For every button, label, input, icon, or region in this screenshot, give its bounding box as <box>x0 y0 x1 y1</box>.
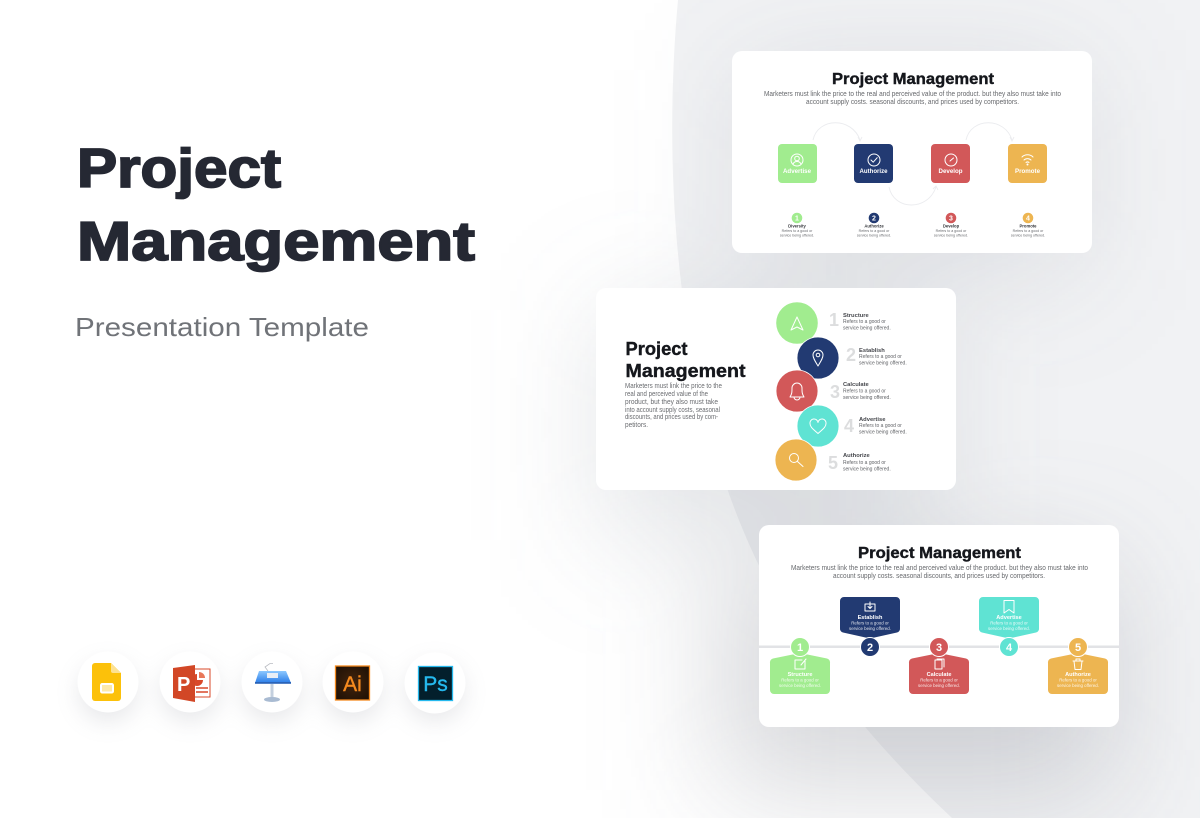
legend: authorize: service being offered. <box>857 234 891 238</box>
step 4: advertise: service being offered. <box>988 626 1030 631</box>
circle: search <box>775 439 817 481</box>
panel: top slide, process flow <box>732 51 1092 253</box>
description <box>764 91 1061 106</box>
item 1: Refers to a good or <box>843 319 886 325</box>
icon: powerpoint <box>173 665 210 702</box>
step 4: advertise: 4 <box>1006 642 1013 654</box>
step 1: structure <box>770 638 830 694</box>
legend: diversity <box>780 213 814 238</box>
step 2: establish: Refers to a good or <box>851 620 889 626</box>
step: promote: Promote <box>1015 168 1040 175</box>
legend: promote: 4 <box>1026 216 1030 222</box>
legend: develop: Develop <box>943 224 960 228</box>
step 4: advertise <box>979 597 1039 656</box>
heading: Project Management <box>832 71 994 88</box>
icon: photoshop <box>418 666 452 700</box>
card shadows <box>600 70 1110 790</box>
step 2: establish <box>840 597 900 656</box>
step: authorize: Authorize <box>860 168 888 175</box>
step 2: establish: service being offered. <box>849 626 891 631</box>
step 5: authorize <box>1048 638 1108 694</box>
description: petitors. <box>625 422 648 429</box>
item 4: Refers to a good or <box>859 423 902 429</box>
description: Marketers must link the price to the <box>625 383 722 390</box>
step 3: calculate: service being offered. <box>918 683 960 688</box>
description: account supply costs. seasonal discounts, and prices used by competitors. <box>833 573 1045 580</box>
step 3: calculate <box>909 638 969 694</box>
step 2: establish: 2 <box>867 642 873 654</box>
step 1: structure: 1 <box>797 642 803 654</box>
icon: illustrator: Ai <box>343 673 362 696</box>
legend: promote: Promote <box>1020 224 1037 228</box>
step 3: calculate: Refers to a good or <box>920 678 958 682</box>
circle: location <box>797 337 839 379</box>
icon: keynote <box>255 664 291 702</box>
item 1: 1 <box>829 310 839 330</box>
description <box>625 383 722 429</box>
main title: Management <box>77 210 475 272</box>
item 2: 2 <box>846 345 856 365</box>
icon: illustrator <box>336 666 370 700</box>
item 5 <box>828 453 891 473</box>
legend: authorize: Refers to a good or <box>859 229 890 233</box>
legend: authorize: Authorize <box>864 224 884 228</box>
step 4: advertise: Refers to a good or <box>990 620 1028 626</box>
icon: photoshop: Ps <box>423 673 448 696</box>
legend: promote <box>1011 213 1045 238</box>
step 5: authorize: Authorize <box>1065 672 1091 678</box>
step 3: calculate: 3 <box>936 642 942 654</box>
step: advertise <box>778 144 817 183</box>
step 1: structure: Structure <box>788 672 812 678</box>
timeline line <box>759 646 1119 648</box>
description: account supply costs. seasonal discounts, and prices used by competitors. <box>806 99 1019 106</box>
item 3: Refers to a good or <box>843 388 886 394</box>
heading: Management <box>626 361 746 381</box>
circle: bell <box>776 370 818 412</box>
step 2: establish: Establish <box>858 615 883 621</box>
step 5: authorize: 5 <box>1075 642 1081 654</box>
panel: bottom slide, timeline <box>759 525 1119 727</box>
circle: heart <box>797 405 839 447</box>
description: Marketers must link the price to the real and perceived value of the product. but they also must take into <box>791 565 1088 572</box>
description: into account supply costs, seasonal <box>625 407 720 414</box>
legend: authorize <box>857 213 891 238</box>
item 3: 3 <box>830 382 840 402</box>
circle: navigation <box>776 302 818 344</box>
item 5: service being offered. <box>843 466 891 472</box>
step: advertise: Advertise <box>783 168 811 175</box>
item 2 <box>846 345 907 366</box>
step: authorize <box>854 144 893 183</box>
item 3: service being offered. <box>843 395 891 401</box>
item 2: Refers to a good or <box>859 354 902 360</box>
legend: diversity: 1 <box>795 216 799 222</box>
arrows <box>813 123 1014 205</box>
subtitle: Presentation Template <box>75 312 369 342</box>
legend: authorize: 2 <box>872 216 876 222</box>
item 1: Structure <box>843 313 870 319</box>
step: develop: Develop <box>938 168 963 175</box>
heading: Project Management <box>858 545 1021 562</box>
heading <box>626 339 746 381</box>
step 4: advertise: Advertise <box>996 615 1022 621</box>
step: promote <box>1008 144 1047 183</box>
legend: diversity: Refers to a good or <box>782 229 813 233</box>
item 4: Advertise <box>859 417 886 423</box>
item 2: Establish <box>859 348 885 354</box>
legend: promote: Refers to a good or <box>1013 229 1044 233</box>
legend: develop: 3 <box>949 216 953 222</box>
item 3 <box>830 382 891 402</box>
description: discounts, and prices used by com- <box>625 414 719 421</box>
item 4 <box>844 416 907 436</box>
legend: diversity: service being offered. <box>780 234 814 238</box>
item 5: 5 <box>828 453 838 473</box>
description <box>791 565 1088 580</box>
step 5: authorize: Refers to a good or <box>1059 678 1097 682</box>
step 1: structure: Refers to a good or <box>781 678 819 682</box>
step: develop <box>931 144 970 183</box>
panel: middle slide, circle list <box>596 288 956 490</box>
main title: Project <box>77 137 281 199</box>
description: Marketers must link the price to the real and perceived value of the product. but they also must take into <box>764 91 1061 98</box>
item 3: Calculate <box>843 382 870 388</box>
description: product, but they also must take <box>625 399 718 406</box>
item 1: service being offered. <box>843 326 891 332</box>
item 4: 4 <box>844 416 854 436</box>
legend: develop <box>934 213 968 238</box>
background blob <box>672 0 1200 818</box>
icon: powerpoint: P <box>177 674 190 696</box>
legend: develop: Refers to a good or <box>936 229 967 233</box>
legend: diversity: Diversity <box>788 224 807 228</box>
step 1: structure: service being offered. <box>779 683 821 688</box>
step 5: authorize: service being offered. <box>1057 683 1099 688</box>
item 4: service being offered. <box>859 430 907 436</box>
description: real and perceived value of the <box>625 391 708 398</box>
heading: Project <box>626 339 688 359</box>
item 5: Refers to a good or <box>843 460 886 466</box>
icon: google slides <box>92 663 121 701</box>
item 1 <box>829 310 891 332</box>
main title <box>77 137 475 272</box>
item 2: service being offered. <box>859 360 907 366</box>
legend: develop: service being offered. <box>934 234 968 238</box>
step 3: calculate: Calculate <box>927 672 951 678</box>
legend: promote: service being offered. <box>1011 234 1045 238</box>
item 5: Authorize <box>843 453 871 459</box>
software icons row <box>78 652 466 721</box>
